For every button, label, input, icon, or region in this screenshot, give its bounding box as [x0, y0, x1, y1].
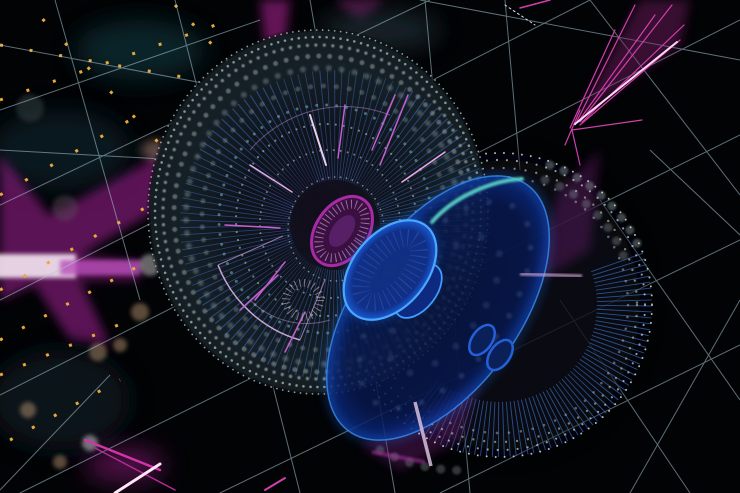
bright blue lens pair	[324, 201, 456, 339]
magenta glow inside right sphere	[360, 150, 600, 470]
pink spikes	[225, 95, 445, 352]
top-right magenta light rays	[505, 0, 690, 165]
radial ticks	[235, 125, 435, 325]
teal arc highlight	[432, 179, 522, 222]
orange grid dots	[0, 0, 250, 440]
soft bokeh dots	[16, 51, 273, 469]
small inner lenses	[464, 320, 500, 360]
dotted rings	[348, 153, 652, 457]
magenta core disk	[299, 185, 385, 277]
background glow: teal and magenta haze	[0, 0, 440, 483]
white light streak at left	[0, 140, 169, 278]
purple arc ring	[218, 265, 300, 340]
left dotted sphere	[146, 27, 490, 397]
gray bokeh in upper right	[380, 165, 640, 470]
pale spikes	[415, 402, 431, 466]
glowing rim	[282, 137, 594, 479]
bokeh speckle in blue disk	[326, 173, 564, 437]
large blue translucent disk	[282, 137, 594, 479]
small dotted rosette	[286, 283, 320, 317]
right dotted sphere	[348, 150, 652, 470]
outer dotted rings	[148, 30, 488, 394]
bottom-left magenta light rays	[85, 440, 285, 493]
radial blue ticks	[420, 262, 624, 429]
